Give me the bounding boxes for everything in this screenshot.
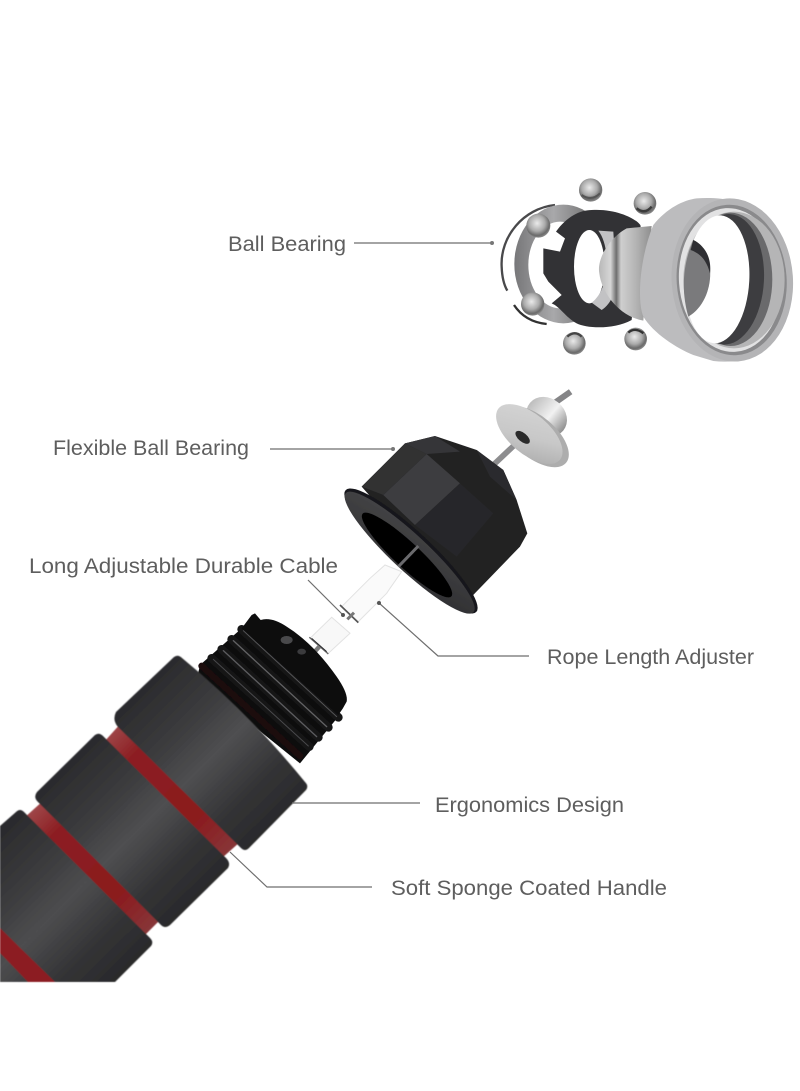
handle grip segment one (114, 656, 307, 850)
bearing ball (526, 214, 550, 238)
bearing ball (579, 178, 602, 202)
label: Rope Length Adjuster: Rope Length Adjuster (547, 646, 754, 669)
silver outer cup (640, 194, 799, 366)
label: Long Adjustable Durable Cable (29, 555, 345, 617)
label: Ball Bearing (228, 233, 494, 256)
red ring one (104, 722, 240, 858)
adjuster flange rim and opening (332, 476, 490, 626)
label: Soft Sponge Coated Handle: Soft Sponge Coated Handle (391, 877, 667, 900)
white length-adjuster tube (309, 565, 402, 655)
label: Ergonomics Design: Ergonomics Design (435, 794, 624, 817)
bearing ball (563, 332, 586, 355)
bearing ball (521, 292, 544, 316)
bearing ball (624, 328, 647, 350)
label: Flexible Ball Bearing: Flexible Ball Bearing (53, 437, 249, 460)
illustration: threaded neck and end cap (197, 613, 347, 763)
illustration: ball bearing assembly (502, 178, 799, 366)
label: Ball Bearing: Ball Bearing (228, 233, 346, 256)
label: Flexible Ball Bearing (53, 437, 395, 460)
handle grip segment two (35, 734, 229, 927)
illustration: black rope adjuster cap (362, 436, 527, 597)
bearing ball (634, 192, 656, 215)
label: Long Adjustable Durable Cable: Long Adjustable Durable Cable (29, 555, 338, 578)
red ring three (0, 928, 55, 982)
label: Rope Length Adjuster (377, 601, 754, 669)
bearing neck (599, 226, 652, 321)
red ring two (24, 800, 160, 938)
illustration: foam handle with red rings (0, 656, 307, 982)
label: Soft Sponge Coated Handle (230, 852, 667, 900)
handle grip segment three (0, 810, 152, 982)
illustration: silver swivel and rod (486, 389, 579, 479)
